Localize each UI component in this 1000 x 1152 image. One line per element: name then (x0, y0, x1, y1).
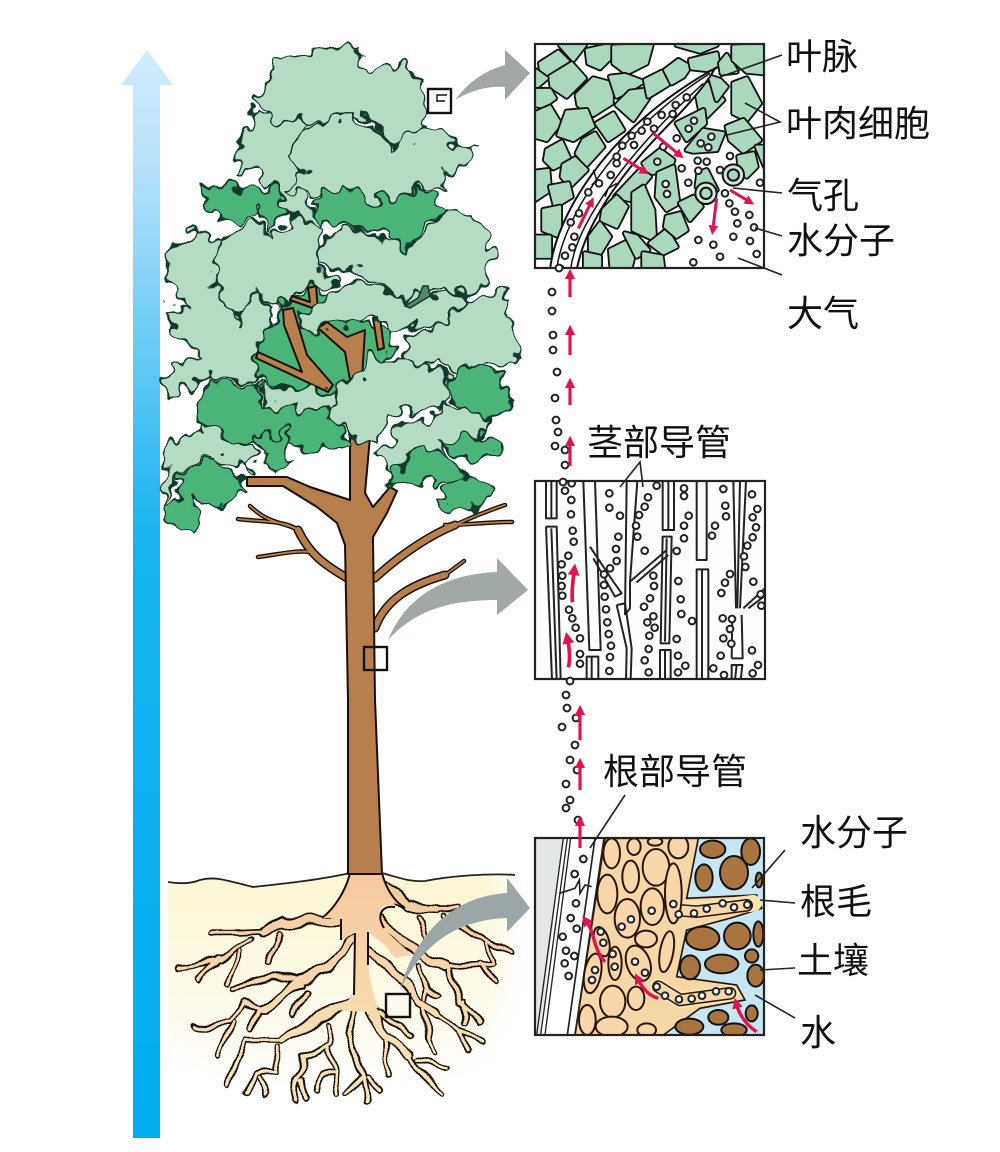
dark foliage (387, 443, 463, 487)
label: water molecules in soil: 水分子 (800, 812, 908, 853)
lower bare branches (238, 505, 512, 628)
red arrows rising between panels (570, 276, 580, 848)
root crown outline (322, 873, 405, 995)
red flow arrows (587, 922, 757, 1032)
inner branches (256, 286, 384, 392)
red flow arrows (578, 133, 748, 228)
dark foliage (440, 433, 500, 463)
foliage clump (330, 357, 447, 440)
dark foliage (203, 187, 290, 233)
panel: root tissue (535, 835, 767, 1037)
label: stem xylem: 茎部导管 (587, 422, 731, 463)
foliage clump (287, 113, 477, 203)
tree canopy: back layer (165, 47, 497, 397)
root outlines (178, 885, 510, 1100)
locator square: root (386, 994, 410, 1017)
foliage clump (260, 387, 333, 413)
foliage clump (380, 403, 490, 477)
vessel wall shading (535, 838, 563, 1035)
root fills (178, 885, 510, 1100)
foliage clump (317, 207, 497, 303)
foliage clump (237, 110, 323, 237)
dark foliage (165, 457, 248, 532)
leader lines (590, 55, 795, 1018)
panel: stem xylem (535, 480, 766, 680)
water molecules (557, 94, 763, 272)
foliage clump (165, 423, 253, 507)
dark foliage centre (257, 287, 393, 390)
dark foliage (313, 187, 450, 250)
water molecules (559, 856, 751, 1003)
foliage clump (260, 47, 427, 143)
label: root xylem: 根部导管 (603, 751, 747, 792)
red flow arrows (568, 572, 574, 667)
root cells (579, 835, 688, 1037)
root tissue (575, 838, 762, 1035)
leaf vein (550, 68, 715, 270)
panel: leaf cross-section (535, 44, 765, 272)
tree trunk and branches (238, 437, 512, 874)
locator square: stem (364, 647, 387, 670)
label: veins: 叶脉 (786, 36, 858, 77)
tree canopy: front layer (165, 280, 520, 532)
soil background (168, 874, 516, 1062)
label: stoma: 气孔 (787, 175, 859, 216)
gray arrow: stem (388, 558, 528, 640)
label: root hair: 根毛 (800, 881, 872, 922)
root crown (322, 873, 412, 1012)
foliage clump (213, 217, 340, 320)
upward blue arrow (121, 50, 173, 1138)
locator square: leaf (428, 89, 451, 113)
dark foliage (260, 430, 290, 470)
mesophyll cells (535, 45, 765, 270)
panel frame: root (535, 838, 764, 1035)
label: mesophyll cells: 叶肉细胞 (786, 103, 930, 144)
dark foliage (447, 363, 512, 423)
panel frame: leaf (535, 44, 764, 268)
dark foliage (437, 473, 493, 513)
soil particles (675, 838, 764, 1037)
gray arrow: root (400, 878, 530, 990)
gray arrow: leaf (455, 50, 530, 100)
xylem vessels (546, 481, 766, 680)
small detail leaf (405, 286, 430, 308)
tree roots (178, 885, 510, 1100)
soil water (666, 839, 763, 1034)
root vessel (537, 838, 604, 1035)
water molecules (558, 480, 765, 678)
foliage clump (297, 280, 470, 333)
trunk (247, 437, 397, 874)
label: atmosphere: 大气 (787, 293, 859, 334)
stomata (695, 164, 744, 204)
foliage clump (165, 230, 283, 397)
label: water: 水 (800, 1012, 836, 1053)
label: water molecules: 水分子 (787, 220, 895, 261)
root hairs (658, 903, 753, 1000)
water molecules rising between panels (549, 265, 581, 823)
label: soil: 土壤 (797, 940, 869, 981)
soil surface line (168, 873, 515, 887)
dark foliage (193, 380, 350, 470)
panel frame: stem (535, 481, 765, 679)
foliage clump (403, 293, 520, 373)
